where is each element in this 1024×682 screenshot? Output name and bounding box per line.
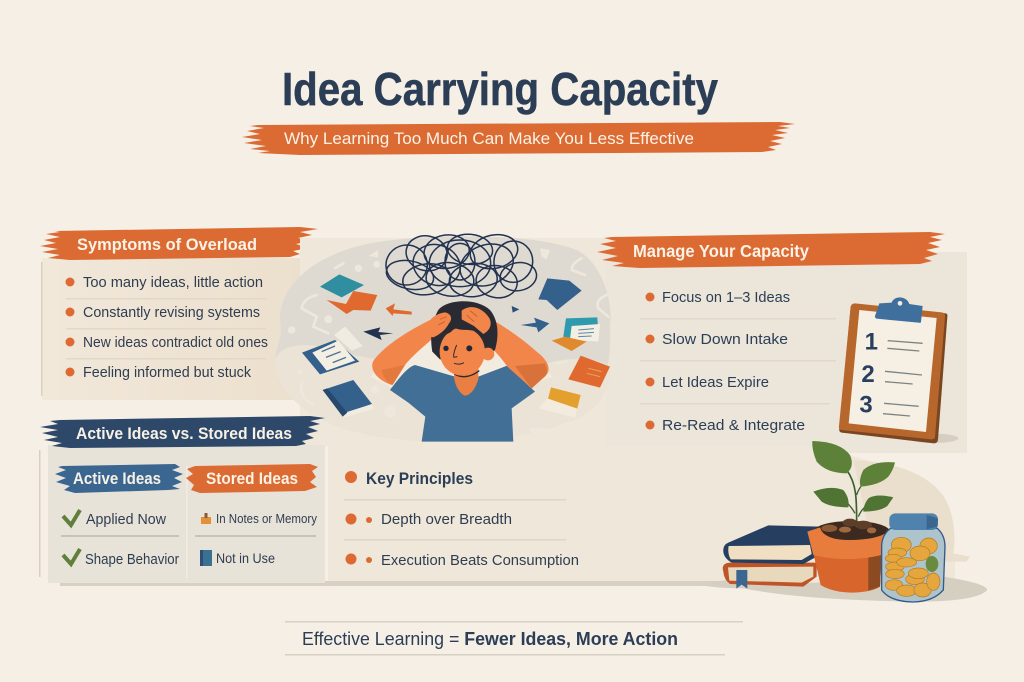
subtitle banner	[242, 122, 795, 155]
symptoms heading: Symptoms of Overload	[77, 235, 257, 254]
active ideas column: Shape Behavior	[85, 552, 179, 568]
symptoms list: Feeling informed but stuck	[83, 365, 252, 381]
principle: depth over breadth: Depth over Breadth	[381, 511, 512, 528]
coin jar	[882, 513, 945, 602]
symptoms list: Constantly revising systems	[83, 305, 260, 321]
manage list: Slow Down Intake	[662, 331, 788, 348]
manage list: Focus on 1–3 Ideas	[662, 289, 790, 306]
icon: clipboard: 2	[861, 361, 875, 388]
books	[723, 525, 820, 589]
active vs stored heading	[40, 416, 325, 448]
active ideas column: Active Ideas	[73, 469, 161, 488]
icon: book	[200, 550, 212, 566]
subtitle banner: Why Learning Too Much Can Make You Less Effective	[284, 129, 694, 148]
active ideas column	[55, 464, 183, 568]
manage list: Let Ideas Expire	[662, 374, 769, 391]
white fragments	[301, 258, 608, 405]
panel: active vs stored ideas	[39, 416, 325, 583]
manage list	[640, 289, 836, 434]
icon: clipboard	[839, 297, 958, 443]
panel: key principles	[60, 446, 955, 586]
stored ideas column	[186, 464, 318, 566]
icon: clipboard: 1	[865, 328, 878, 355]
footer takeaway: Effective Learning = Fewer Ideas, More Action	[302, 629, 678, 649]
symptoms list	[66, 275, 268, 381]
manage heading	[597, 232, 945, 268]
plant	[812, 441, 895, 522]
stored ideas column: Not in Use	[216, 550, 275, 566]
panel: manage your capacity	[300, 232, 967, 453]
backdrop and shadow	[700, 460, 987, 602]
pot	[807, 519, 890, 593]
key principles heading: Key Principles	[366, 469, 473, 488]
symptoms list: New ideas contradict old ones	[83, 335, 268, 351]
symptoms heading	[40, 227, 318, 260]
background blob	[275, 236, 611, 441]
principle: execution beats consumption: Execution Beats Consumption	[381, 552, 579, 569]
icon: clipboard: 3	[859, 392, 873, 419]
person	[372, 301, 549, 442]
symptoms list: Too many ideas, little action	[83, 275, 263, 291]
manage list: Re-Read & Integrate	[662, 417, 805, 434]
stored ideas column: Stored Ideas	[206, 469, 298, 488]
active ideas column: Applied Now	[86, 512, 167, 528]
active vs stored heading: Active Ideas vs. Stored Ideas	[76, 424, 292, 443]
title: Idea Carrying Capacity	[282, 63, 718, 115]
floating papers and books	[302, 274, 610, 418]
manage heading: Manage Your Capacity	[633, 241, 809, 261]
illustration: books, plant and coin jar	[700, 441, 987, 602]
panel: symptoms of overload	[40, 227, 318, 400]
central illustration: overwhelmed person	[275, 230, 611, 442]
icon: basket	[201, 513, 211, 524]
stored ideas column: In Notes or Memory	[216, 511, 318, 526]
scribble	[383, 230, 539, 301]
